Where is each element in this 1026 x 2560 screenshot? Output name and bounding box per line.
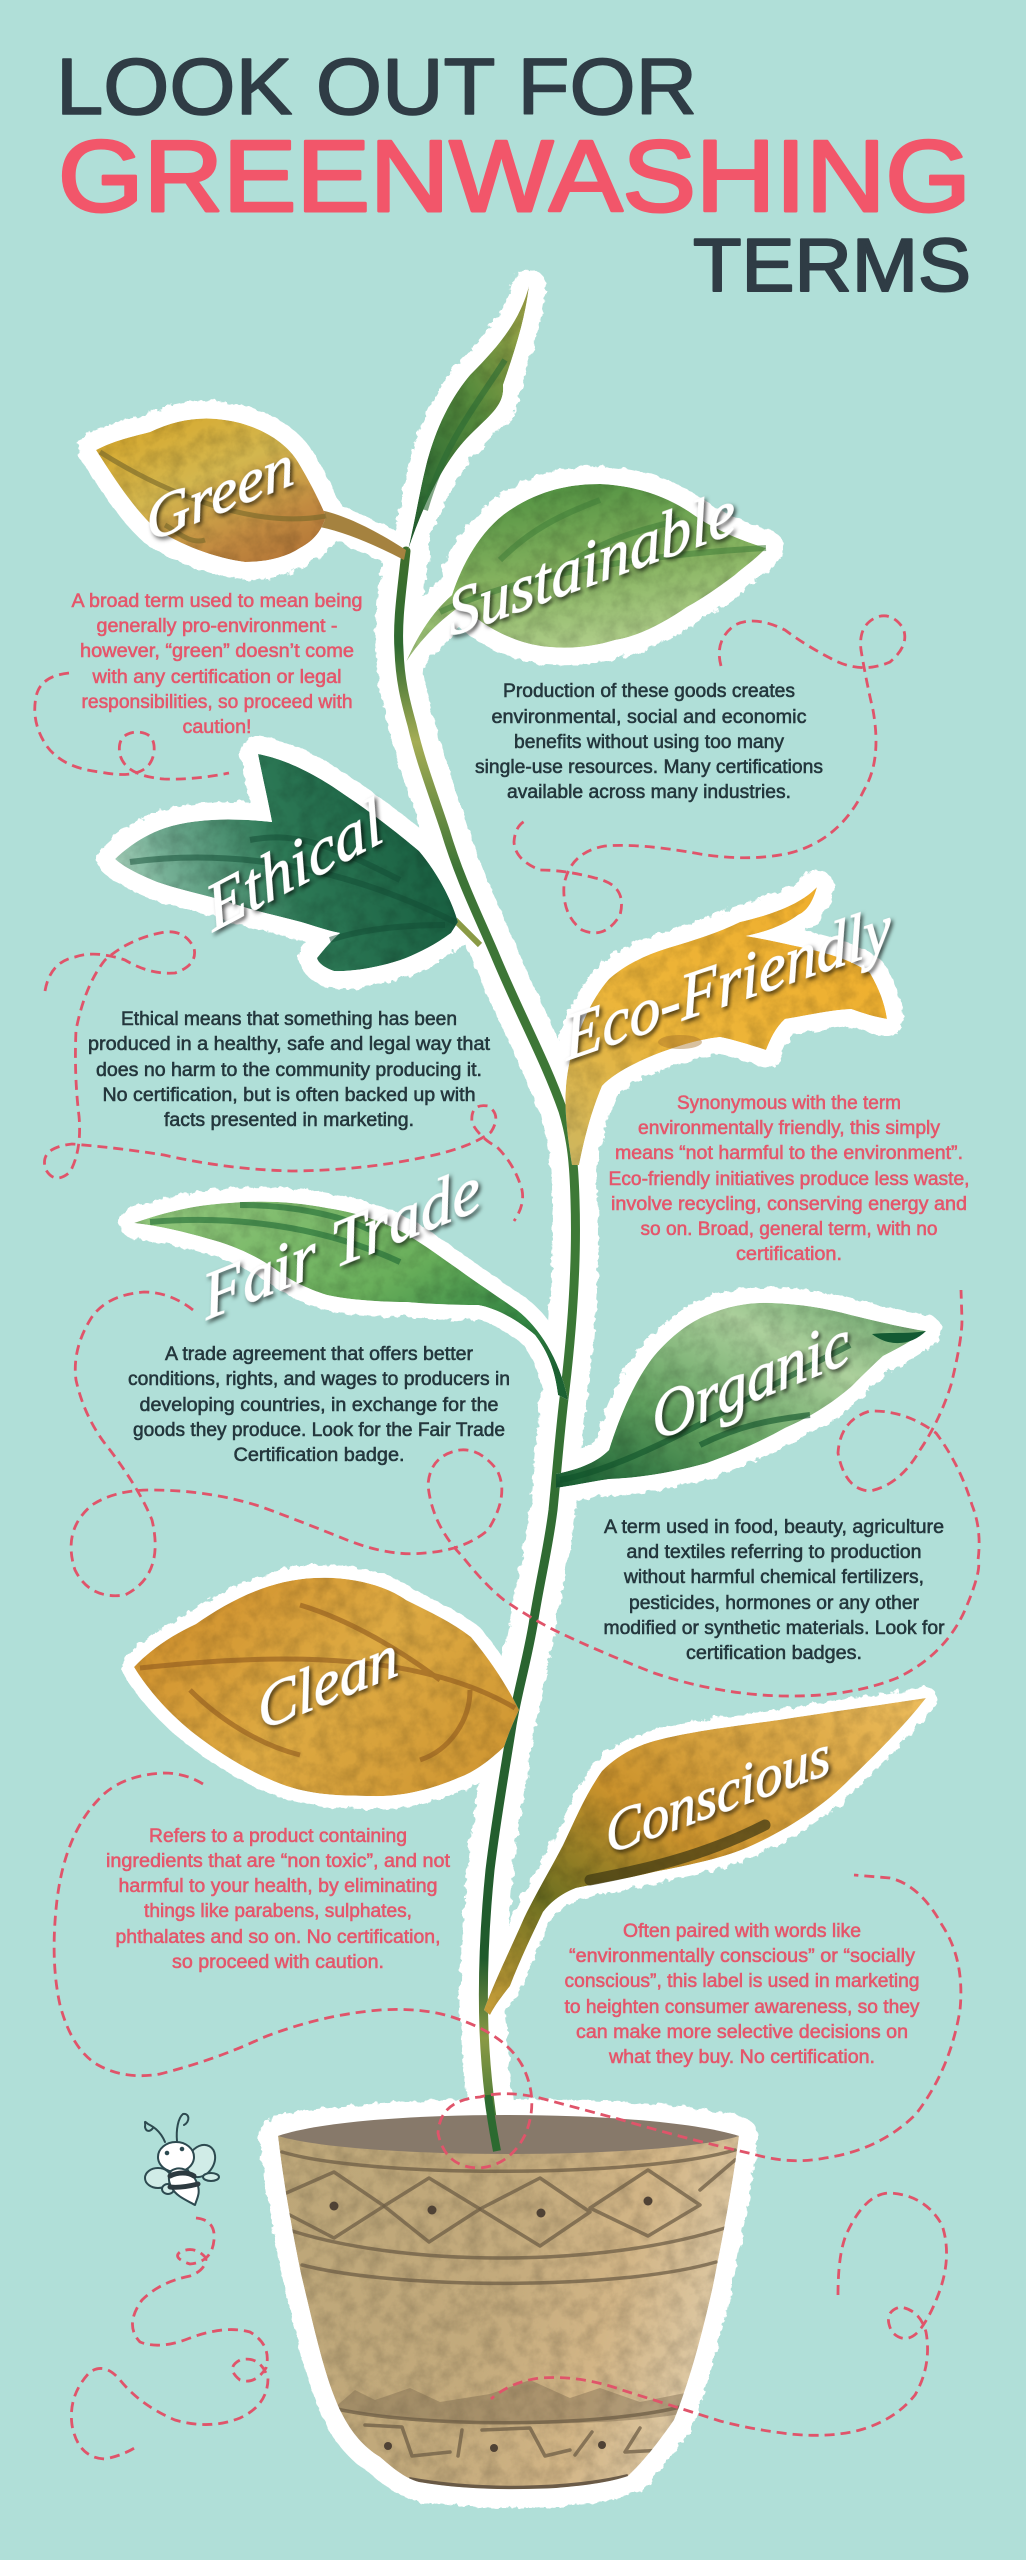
sustainable description: benefits without using too many xyxy=(514,732,784,753)
conscious description: what they buy. No certification. xyxy=(608,2047,875,2068)
clean label: Clean xyxy=(253,1621,402,1745)
organic description: without harmful chemical fertilizers, xyxy=(623,1567,924,1588)
conscious description xyxy=(564,1921,920,2068)
green description xyxy=(72,591,362,738)
fair trade leaf xyxy=(134,1202,568,1400)
conscious label: Conscious xyxy=(603,1722,833,1867)
ethical leaf xyxy=(115,754,480,971)
term: organic xyxy=(556,1303,945,1664)
term: clean xyxy=(106,1578,519,1973)
conscious description: to heighten consumer awareness, so they xyxy=(564,1997,920,2018)
term: conscious xyxy=(484,1698,926,2068)
ethical label: Ethical xyxy=(198,784,390,947)
green description: generally pro-environment - xyxy=(96,616,338,637)
fair trade description xyxy=(128,1344,510,1466)
sustainable description: available across many industries. xyxy=(507,782,791,803)
fair trade description: developing countries, in exchange for the xyxy=(140,1395,498,1416)
organic description: A term used in food, beauty, agriculture xyxy=(604,1517,944,1538)
stem xyxy=(399,551,575,2151)
fair trade label: Fair Trade xyxy=(197,1151,485,1336)
clean leaf xyxy=(134,1578,519,1796)
sustainable description: environmental, social and economic xyxy=(492,707,806,728)
eco-friendly description: certification. xyxy=(736,1244,842,1265)
eco-friendly leaf xyxy=(565,887,887,1165)
organic leaf xyxy=(556,1303,926,1488)
clean description: harmful to your health, by eliminating xyxy=(118,1876,438,1897)
green description: with any certification or legal xyxy=(91,667,342,688)
title: GREENWASHING xyxy=(58,121,971,233)
conscious leaf xyxy=(484,1698,926,2015)
fair trade description: Certification badge. xyxy=(234,1445,404,1466)
ethical description xyxy=(88,1009,491,1131)
clean description: Refers to a product containing xyxy=(149,1826,407,1847)
title xyxy=(56,42,971,307)
icon: bee xyxy=(145,2114,221,2205)
ethical description: No certification, but is often backed up with xyxy=(102,1085,475,1106)
ethical description: facts presented in marketing. xyxy=(164,1110,414,1131)
clean description xyxy=(106,1826,451,1973)
white plant and pot outline xyxy=(96,286,926,2489)
ethical description: Ethical means that something has been xyxy=(121,1009,457,1030)
pot xyxy=(278,2095,739,2489)
green description: caution! xyxy=(182,717,252,738)
eco-friendly description: environmentally friendly, this simply xyxy=(638,1118,940,1139)
title: LOOK OUT FOR xyxy=(56,42,697,131)
clean description: so proceed with caution. xyxy=(172,1952,384,1973)
sustainable description xyxy=(475,681,823,803)
sustainable description: Production of these goods creates xyxy=(503,681,795,702)
conscious description: Often paired with words like xyxy=(623,1921,861,1942)
term: fair trade xyxy=(128,1151,568,1466)
term: green xyxy=(72,418,406,738)
organic description: and textiles referring to production xyxy=(626,1542,922,1563)
organic description: pesticides, hormones or any other xyxy=(629,1593,920,1614)
green description: however, “green” doesn’t come xyxy=(80,641,354,662)
title: TERMS xyxy=(693,223,971,307)
top unlabelled leaf xyxy=(408,286,529,550)
sustainable label: Sustainable xyxy=(445,475,739,652)
organic label: Organic xyxy=(647,1304,854,1456)
sustainable description: single-use resources. Many certifications xyxy=(475,757,823,778)
eco-friendly label: Eco-Friendly xyxy=(561,891,894,1076)
sustainable leaf xyxy=(406,484,766,662)
eco-friendly description: Synonymous with the term xyxy=(677,1093,901,1114)
clean description: things like parabens, sulphates, xyxy=(144,1901,412,1922)
dashed trail: sustainable xyxy=(514,616,905,933)
term: eco-friendly xyxy=(561,887,970,1265)
dashed trail: ethical xyxy=(44,932,523,1221)
green description: A broad term used to mean being xyxy=(72,591,362,612)
eco-friendly description: so on. Broad, general term, with no xyxy=(640,1219,938,1240)
dashed trail: bee flight xyxy=(71,2218,268,2459)
green description: responsibilities, so proceed with xyxy=(82,692,352,713)
eco-friendly description: Eco-friendly initiatives produce less waste, xyxy=(608,1169,970,1190)
fair trade description: A trade agreement that offers better xyxy=(165,1344,474,1365)
conscious description: conscious”, this label is used in marketing xyxy=(564,1971,920,1992)
clean description: phthalates and so on. No certification, xyxy=(116,1927,440,1948)
ethical description: produced in a healthy, safe and legal way that xyxy=(88,1034,491,1055)
eco-friendly description xyxy=(608,1093,970,1265)
conscious description: can make more selective decisions on xyxy=(576,2022,908,2043)
ethical description: does no harm to the community producing it. xyxy=(96,1060,482,1081)
green label: Green xyxy=(142,430,298,555)
eco-friendly description: involve recycling, conserving energy and xyxy=(611,1194,967,1215)
organic description: modified or synthetic materials. Look for xyxy=(604,1618,945,1639)
dashed trail: fair trade and organic xyxy=(71,1290,979,1696)
fair trade description: conditions, rights, and wages to producers in xyxy=(128,1369,510,1390)
term: ethical xyxy=(88,754,491,1131)
dashed trail: clean and conscious xyxy=(54,1773,961,2168)
eco-friendly description: means “not harmful to the environment”. xyxy=(615,1143,963,1164)
conscious description: “environmentally conscious” or “socially xyxy=(569,1946,916,1967)
organic description xyxy=(604,1517,945,1664)
term: sustainable xyxy=(406,475,823,803)
dashed trail: bottom right xyxy=(491,2193,947,2435)
green leaf xyxy=(96,418,406,562)
clean description: ingredients that are “non toxic”, and not xyxy=(106,1851,451,1872)
fair trade description: goods they produce. Look for the Fair Trade xyxy=(133,1420,505,1441)
dashed trail: green xyxy=(35,673,229,779)
organic description: certification badges. xyxy=(686,1643,862,1664)
